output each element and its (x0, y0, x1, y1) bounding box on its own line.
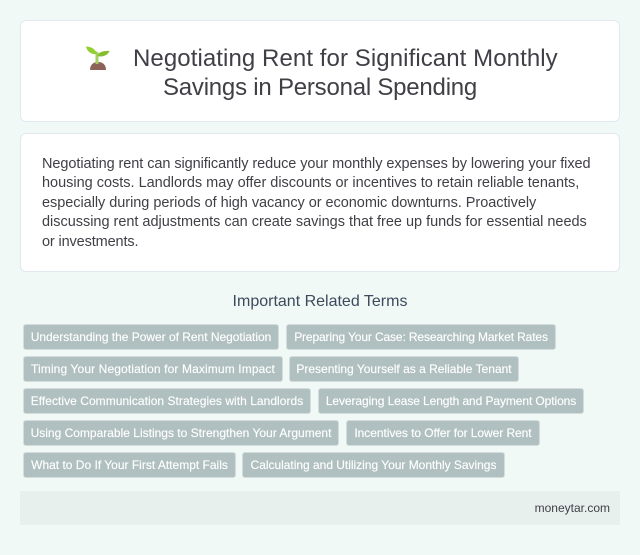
chip: Calculating and Utilizing Your Monthly Savings (251, 458, 496, 472)
chip (318, 388, 584, 414)
chip: Understanding the Power of Rent Negotiation (31, 330, 271, 344)
chip (23, 388, 311, 414)
chip: Timing Your Negotiation for Maximum Impact (31, 362, 275, 376)
icon: seedling (86, 46, 110, 70)
panel: title card: Savings in Personal Spending (163, 74, 477, 101)
chip (23, 452, 236, 478)
chip: Incentives to Offer for Lower Rent (354, 426, 532, 440)
panel: summary paragraph (20, 133, 620, 272)
list: related term chips (23, 324, 584, 478)
chip (23, 420, 339, 446)
chip (346, 420, 540, 446)
text: summary: discussing rent adjustments can create savings that free up funds for essential needs (42, 214, 587, 230)
chip: Using Comparable Listings to Strengthen Your Argument (31, 426, 331, 440)
text: summary: housing costs. Landlords may offer discounts or incentives to retain reliable tenants, (42, 175, 579, 191)
chip (242, 452, 505, 478)
panel: title card (20, 20, 620, 122)
chip: Preparing Your Case: Researching Market Rates (294, 330, 548, 344)
chip: Presenting Yourself as a Reliable Tenant (296, 362, 512, 376)
chip: Effective Communication Strategies with Landlords (31, 394, 303, 408)
chip: Leveraging Lease Length and Payment Options (326, 394, 576, 408)
chip (23, 324, 279, 350)
heading: related terms: Important Related Terms (233, 293, 407, 310)
text: summary (42, 156, 590, 250)
chip (286, 324, 556, 350)
chip (23, 356, 283, 382)
chip (289, 356, 519, 382)
text: summary: especially during periods of high vacancy or economic downturns. Proactively (42, 195, 536, 211)
footer: site name: moneytar.com (535, 501, 610, 515)
footer bar (20, 491, 620, 525)
title: Negotiating Rent for Significant Monthly (133, 45, 558, 72)
text: summary: or investments. (42, 234, 138, 250)
chip: What to Do If Your First Attempt Fails (31, 458, 228, 472)
text: summary: Negotiating rent can significantly reduce your monthly expenses by lowering your fixed (42, 156, 590, 172)
